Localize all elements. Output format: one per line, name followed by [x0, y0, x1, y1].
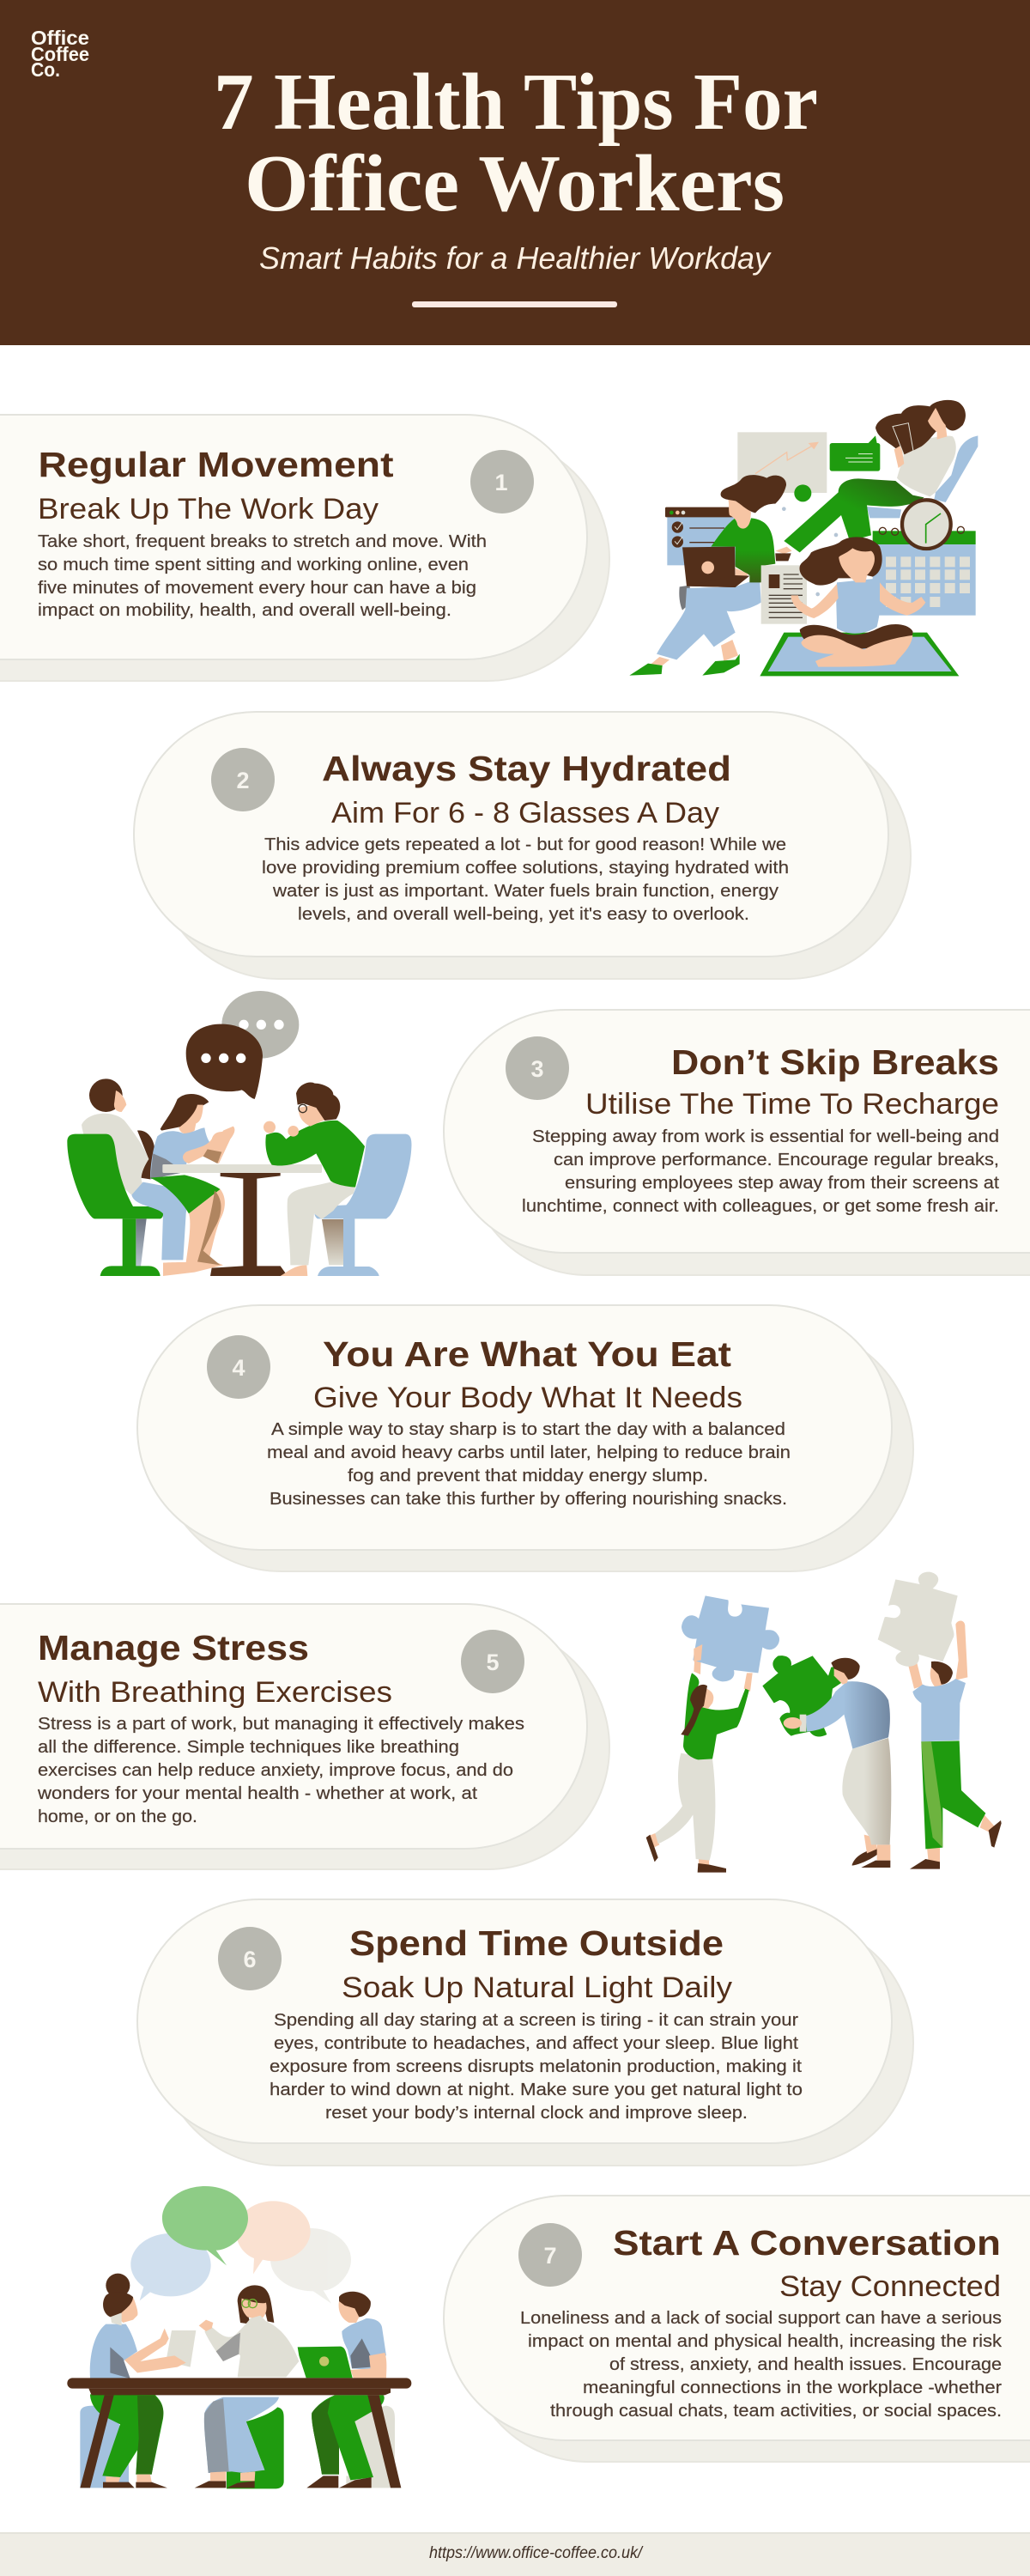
woman with laptop: [629, 475, 786, 676]
heading: Start A Conversation: [613, 2223, 1001, 2263]
woman holding blue puzzle: [646, 1595, 779, 1873]
body text: ensuring employees step away from their screens at: [565, 1173, 999, 1193]
browser window: [665, 507, 736, 565]
man holding cream puzzle: [878, 1572, 1002, 1869]
number badge 2: [211, 748, 275, 811]
logo: [31, 27, 89, 81]
clock: [902, 500, 951, 549]
panel: tip 1 regular movement: [0, 415, 609, 681]
middle woman: [195, 2285, 299, 2488]
blue chair: [314, 1134, 411, 1276]
body text: This advice gets repeated a lot - but for good reason! While we: [264, 835, 786, 854]
man in green jumper: [264, 1082, 365, 1276]
body text: [38, 532, 487, 620]
calendar: [873, 526, 976, 616]
illustration: women working and meditating: [629, 400, 978, 676]
body text: eyes, contribute to headaches, and affect your sleep. Blue light: [274, 2033, 798, 2053]
body text: exposure from screens disrupts melatonin production, making it: [270, 2057, 802, 2076]
heading: Manage Stress: [38, 1628, 309, 1668]
body text: through casual chats, team activities, or social spaces.: [550, 2401, 1002, 2421]
panel: tip 7 conversation: [444, 2196, 1030, 2462]
heading: Don’t Skip Breaks: [671, 1042, 999, 1082]
body text: meal and avoid heavy carbs until later, helping to reduce brain: [267, 1443, 791, 1462]
header banner: [0, 0, 1030, 345]
panel: tip 2 stay hydrated: [134, 712, 911, 979]
speech bubbles: [130, 2186, 351, 2304]
body text: exercises can help reduce anxiety, improve focus, and do: [38, 1760, 513, 1780]
body text: [522, 1127, 999, 1216]
title: Office Workers: [245, 139, 785, 228]
body text: Loneliness and a lack of social support can have a serious: [520, 2308, 1002, 2328]
number badge 4: 4: [232, 1355, 245, 1381]
subheading: Break Up The Work Day: [38, 493, 379, 526]
panel: tip 5 manage stress: [0, 1604, 609, 1869]
header divider bar: [412, 301, 617, 307]
body text: Businesses can take this further by offering nourishing snacks.: [270, 1489, 787, 1509]
woman seated: [150, 1094, 234, 1276]
body text: reset your body’s internal clock and improve sleep.: [325, 2103, 748, 2123]
meditating woman: [791, 537, 925, 667]
body text: [262, 835, 789, 924]
subheading: Give Your Body What It Needs: [313, 1382, 742, 1414]
subheading: Soak Up Natural Light Daily: [342, 1971, 732, 2004]
body text: impact on mobility, health, and overall well-being.: [38, 600, 451, 620]
body text: Spending all day staring at a screen is tiring - it can strain your: [274, 2010, 798, 2030]
speech box: [830, 435, 880, 471]
body text: [267, 1419, 791, 1509]
heading: You Are What You Eat: [323, 1334, 731, 1374]
number badge 5: [461, 1630, 524, 1693]
number badge 3: [506, 1036, 569, 1100]
left woman: [90, 2274, 196, 2488]
subheading: With Breathing Exercises: [38, 1676, 392, 1709]
body text: of stress, anxiety, and health issues. Encourage: [609, 2354, 1002, 2374]
illustration: colleagues chatting at table: [67, 991, 411, 1276]
body text: love providing premium coffee solutions, staying hydrated with: [262, 858, 789, 878]
reclining woman: [775, 400, 978, 561]
body text: [270, 2010, 803, 2123]
footer url: https://www.office-coffee.co.uk/: [429, 2544, 644, 2562]
number badge 5: 5: [486, 1649, 500, 1675]
subheading: Aim For 6 - 8 Glasses A Day: [331, 797, 719, 829]
body text: impact on mental and physical health, increasing the risk: [528, 2331, 1003, 2351]
document: [761, 565, 807, 624]
table: [162, 1164, 322, 1276]
body text: lunchtime, connect with colleagues, or get some fresh air.: [522, 1196, 999, 1216]
number badge 7: 7: [543, 2243, 557, 2269]
number badge 1: 1: [494, 470, 508, 495]
body text: wonders for your mental health - whether at work, at: [37, 1783, 477, 1803]
title: 7 Health Tips For: [214, 58, 818, 147]
title: [214, 58, 818, 228]
logo: Co.: [31, 58, 60, 81]
brown speech bubble: [186, 1024, 263, 1099]
panel: tip 6 time outside: [137, 1899, 913, 2166]
logo: Office: [31, 27, 89, 49]
illustration: team conversation at long table: [67, 2186, 411, 2488]
panel: tip 3 skip breaks: [444, 1010, 1030, 1275]
subheading: Stay Connected: [779, 2270, 1001, 2303]
man holding green puzzle: [762, 1656, 891, 1868]
number badge 4: [207, 1335, 270, 1399]
panel: tip 4 what you eat: [137, 1305, 913, 1571]
man on green chair: [67, 1078, 186, 1276]
number badge 2: 2: [236, 768, 250, 793]
number badge 6: [218, 1927, 282, 1990]
green dot: [794, 484, 811, 501]
body text: A simple way to stay sharp is to start the day with a balanced: [271, 1419, 785, 1439]
long table: [67, 2378, 411, 2488]
heading: Regular Movement: [38, 445, 394, 484]
body text: home, or on the go.: [38, 1807, 197, 1826]
body text: Stepping away from work is essential for well-being and: [532, 1127, 999, 1146]
body text: water is just as important. Water fuels brain function, energy: [272, 881, 779, 901]
seats: [80, 2406, 395, 2488]
heading: Always Stay Hydrated: [322, 749, 731, 788]
footer: [0, 2532, 1030, 2576]
body text: harder to wind down at night. Make sure you get natural light to: [270, 2080, 803, 2099]
number badge 3: 3: [530, 1056, 544, 1082]
logo: Coffee: [31, 43, 89, 65]
body text: [520, 2308, 1003, 2421]
number badge 1: [470, 450, 534, 513]
subheading: Utilise The Time To Recharge: [585, 1088, 999, 1121]
body text: five minutes of movement every hour can have a big: [38, 578, 476, 598]
heading: Spend Time Outside: [349, 1923, 724, 1963]
grey speech bubble: [221, 991, 299, 1059]
right man: [298, 2292, 386, 2488]
yoga mat: [760, 633, 959, 676]
body text: fog and prevent that midday energy slump.: [348, 1466, 708, 1485]
body text: Take short, frequent breaks to stretch and move. With: [38, 532, 487, 551]
body text: levels, and overall well-being, yet it's easy to overlook.: [298, 904, 749, 924]
body text: Stress is a part of work, but managing it effectively makes: [38, 1714, 524, 1734]
body text: can improve performance. Encourage regular breaks,: [554, 1150, 999, 1170]
small dots: [782, 507, 838, 596]
number badge 6: 6: [243, 1947, 257, 1972]
illustration: team with puzzle pieces: [646, 1572, 1002, 1873]
body text: [37, 1714, 524, 1826]
body text: meaningful connections in the workplace -whether: [583, 2378, 1002, 2397]
body text: so much time spent sitting and working online, even: [38, 555, 469, 574]
chart board: [737, 432, 827, 493]
subtitle: Smart Habits for a Healthier Workday: [259, 240, 772, 276]
body text: all the difference. Simple techniques like breathing: [38, 1737, 459, 1757]
number badge 7: [518, 2223, 582, 2287]
